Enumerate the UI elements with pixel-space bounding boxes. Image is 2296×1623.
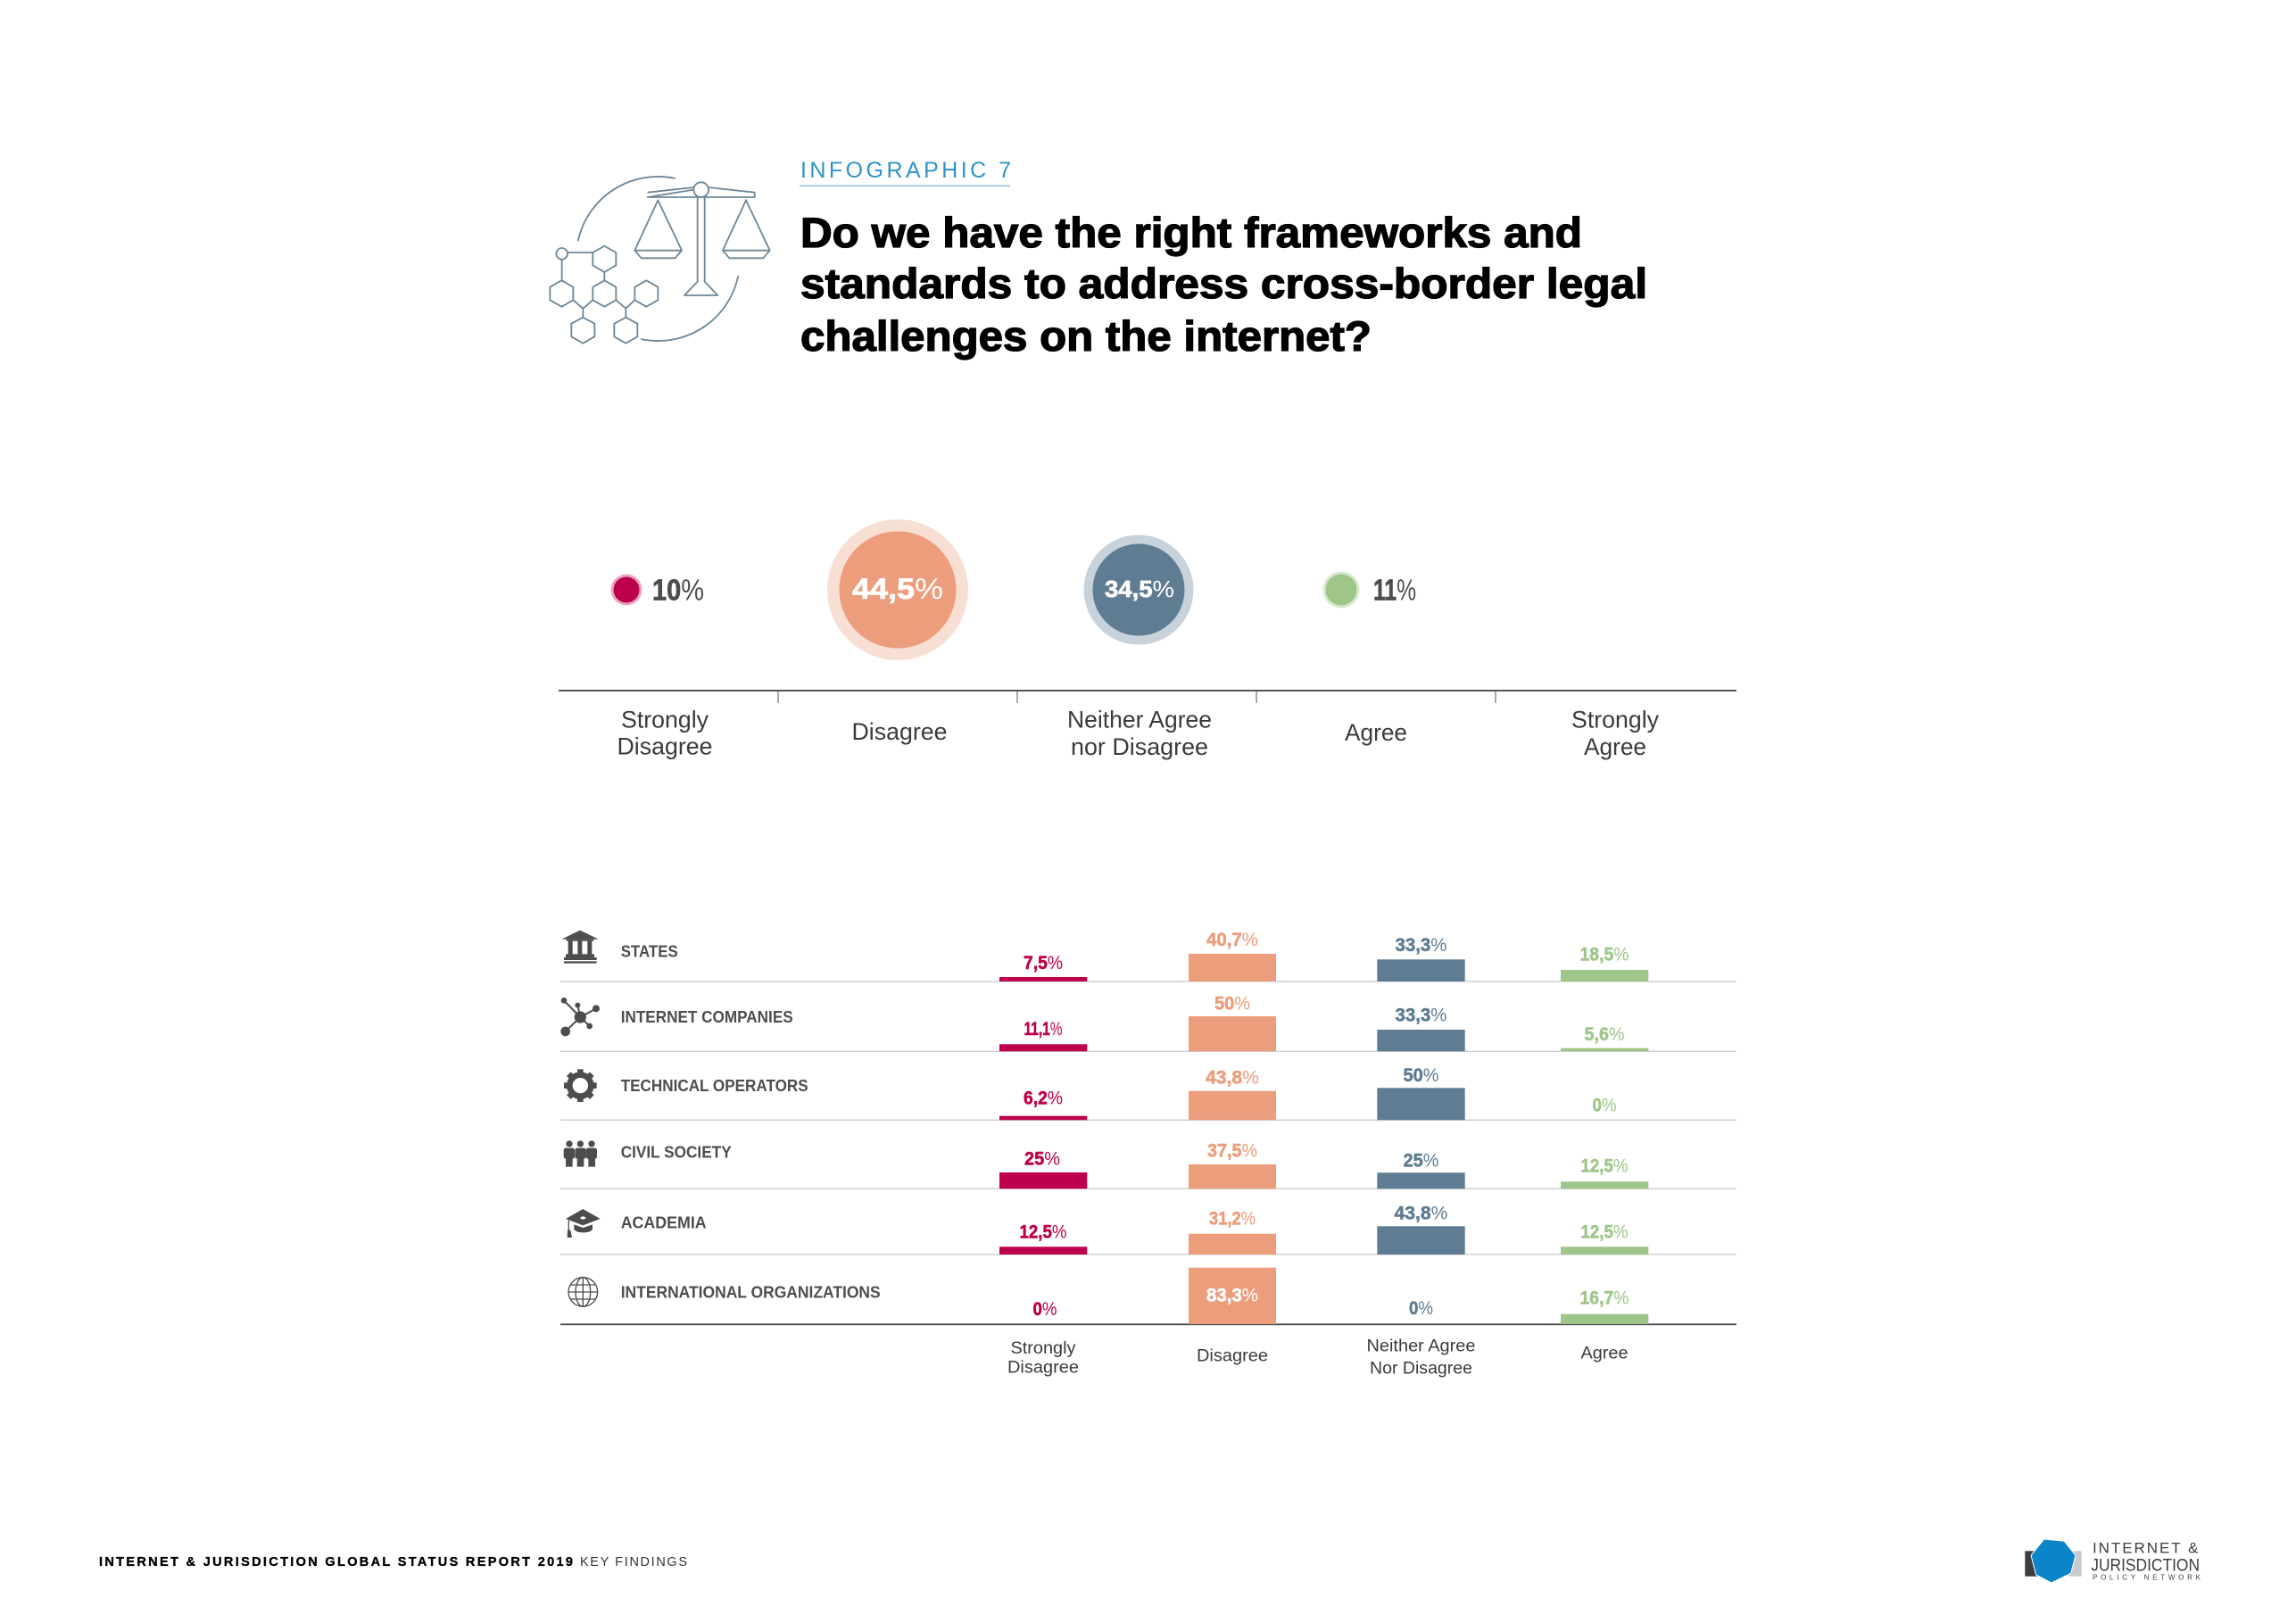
row: technical operators: 43,8%: [1206, 1067, 1259, 1089]
row: technical operators: 0%: [1592, 1095, 1617, 1116]
row: technical operators: 50%: [1403, 1064, 1438, 1086]
scale labels: Disagree: [851, 718, 948, 745]
row: states: STATES: [621, 942, 678, 961]
logo: internet and jurisdiction policy network: [2025, 1539, 2201, 1583]
row: states: 40,7%: [1206, 929, 1258, 950]
row: international organizations: 0%: [1409, 1297, 1433, 1319]
bubble: strongly disagree 10%: 10%: [652, 573, 704, 607]
row: civil society: [564, 1140, 1648, 1188]
kicker: infographic number: INFOGRAPHIC 7: [800, 158, 1011, 183]
row: internet companies: 33,3%: [1396, 1004, 1447, 1025]
row: states: 18,5%: [1579, 944, 1629, 965]
row: technical operators: [564, 1064, 1617, 1120]
bubble: agree 11%: [1322, 571, 1416, 609]
row: civil society: 37,5%: [1207, 1140, 1257, 1162]
row: internet companies: 11,1%: [1024, 1018, 1062, 1039]
row: civil society: 25%: [1403, 1150, 1438, 1172]
row: states: [561, 929, 1648, 981]
row: civil society: 12,5%: [1581, 1155, 1628, 1177]
row: technical operators: 6,2%: [1024, 1087, 1063, 1108]
row: internet companies: 50%: [1214, 992, 1250, 1014]
column labels: [1007, 1336, 1628, 1378]
row: internet companies: 5,6%: [1585, 1023, 1624, 1045]
bubble: agree 11%: 11%: [1373, 573, 1416, 607]
column labels: Disagree: [1007, 1357, 1079, 1377]
icon: bank building: [561, 931, 599, 964]
logo: internet and jurisdiction policy network: JURISDICTION: [2091, 1557, 2200, 1576]
row: academia: [566, 1202, 1648, 1255]
row: states: 7,5%: [1024, 952, 1063, 973]
title: Do we have the right frameworks and: [800, 209, 1582, 256]
scale labels: [618, 707, 1660, 760]
bubble: strongly disagree 10%: [610, 573, 704, 607]
icon: scales of justice and network: [550, 177, 770, 344]
logo: internet and jurisdiction policy network: INTERNET &: [2093, 1540, 2199, 1557]
footer text: INTERNET & JURISDICTION GLOBAL STATUS REPORT 2019: [99, 1555, 573, 1569]
row: technical operators: TECHNICAL OPERATORS: [621, 1076, 808, 1095]
panel: answers by stakeholder group: [560, 929, 1737, 1378]
row: internet companies: [560, 992, 1648, 1051]
scale labels: Strongly: [1571, 707, 1660, 733]
title: [800, 209, 1647, 360]
column labels: Neither Agree: [1367, 1336, 1476, 1355]
panel: overall answers bubble scale: [559, 519, 1737, 760]
row: international organizations: [568, 1268, 1648, 1324]
scale labels: Agree: [1345, 719, 1407, 746]
row: international organizations: 83,3%: [1206, 1284, 1258, 1305]
row: academia: 31,2%: [1209, 1207, 1256, 1229]
scale labels: Disagree: [618, 733, 712, 760]
logo: internet and jurisdiction policy network: POLICY NETWORK: [2093, 1574, 2201, 1582]
scale axis: [559, 690, 1737, 703]
row: academia: 12,5%: [1019, 1221, 1067, 1242]
column labels: Nor Disagree: [1370, 1358, 1472, 1378]
row: civil society: 25%: [1024, 1148, 1060, 1170]
icon: network nodes: [560, 998, 600, 1036]
icon: graduation cap: [566, 1209, 601, 1238]
bubble: disagree 44,5%: 44,5%: [852, 573, 943, 605]
row: international organizations: 16,7%: [1579, 1287, 1629, 1308]
footer text: KEY FINDINGS: [580, 1555, 687, 1569]
scale labels: Strongly: [621, 707, 709, 733]
scale labels: nor Disagree: [1071, 733, 1208, 760]
row: international organizations: 0%: [1033, 1298, 1057, 1320]
title: challenges on the internet?: [800, 312, 1372, 360]
row: international organizations: INTERNATIONAL ORGANIZATIONS: [621, 1283, 881, 1302]
row: academia: 43,8%: [1394, 1202, 1447, 1223]
column labels: Disagree: [1197, 1346, 1268, 1366]
title: standards to address cross-border legal: [800, 260, 1647, 307]
bubble: disagree 44,5%: [827, 519, 968, 660]
bubble: neither agree nor disagree 34,5%: 34,5%: [1105, 576, 1174, 602]
icon: three people: [564, 1140, 597, 1167]
scale labels: Neither Agree: [1067, 707, 1212, 733]
icon: globe: [568, 1278, 598, 1306]
scale labels: Agree: [1584, 733, 1646, 760]
row: academia: 12,5%: [1581, 1221, 1628, 1242]
row: civil society: CIVIL SOCIETY: [621, 1143, 732, 1162]
column labels: Agree: [1581, 1343, 1628, 1362]
column labels: Strongly: [1010, 1338, 1076, 1358]
row: internet companies: INTERNET COMPANIES: [621, 1007, 793, 1026]
icon: gear: [564, 1069, 597, 1102]
row: academia: ACADEMIA: [621, 1213, 707, 1231]
row: states: 33,3%: [1396, 934, 1447, 956]
bubble: neither agree nor disagree 34,5%: [1083, 535, 1194, 644]
